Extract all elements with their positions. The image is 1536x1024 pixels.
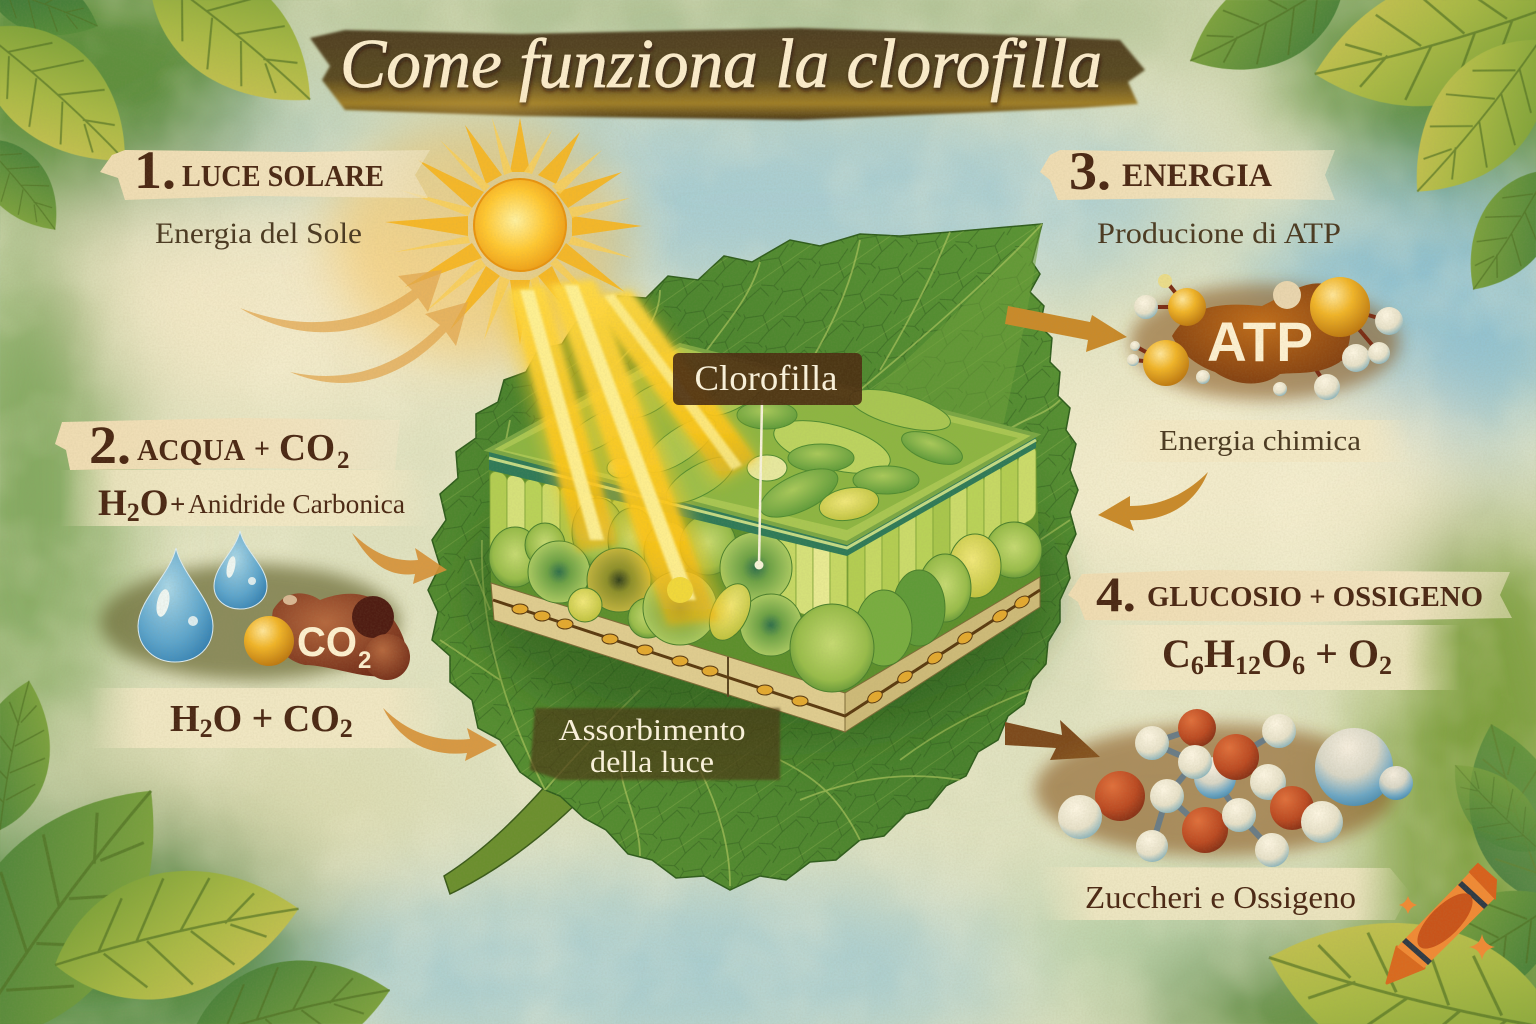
label: clorofilla <box>673 353 862 570</box>
energia chimica caption <box>1110 420 1410 462</box>
icon: CO2 molecule: 2 <box>358 647 371 674</box>
step 2 description: H <box>98 483 127 524</box>
step 2 heading <box>55 415 400 475</box>
icon: small water drop <box>214 531 267 609</box>
step 2 heading: CO <box>279 427 335 469</box>
leaf stem <box>444 775 585 894</box>
label: assorbimento della luce <box>530 708 780 780</box>
leaf blade <box>428 224 1078 890</box>
icon: crayon <box>1387 864 1496 983</box>
formula glucose + oxygen: 6 <box>1191 651 1204 680</box>
spongy mesophyll cells <box>489 498 1042 692</box>
formula glucose + oxygen: O <box>1261 631 1292 676</box>
step 2 description: O <box>140 483 169 524</box>
step 4 heading <box>1068 566 1512 622</box>
label: assorbimento della luce: Assorbimento <box>558 712 746 747</box>
sunlight arrows <box>240 270 468 383</box>
step 2 heading: 2 <box>337 447 350 474</box>
formula glucose + oxygen: 2 <box>1379 651 1392 680</box>
zuccheri e ossigeno caption <box>1040 867 1410 920</box>
formula H2O + CO2 <box>90 688 440 748</box>
palisade cells left face <box>490 470 847 636</box>
step 4 heading: GLUCOSIO + OSSIGENO <box>1147 581 1483 613</box>
sun disc <box>474 179 566 271</box>
zuccheri e ossigeno caption: Zuccheri e Ossigeno <box>1085 879 1356 915</box>
label: assorbimento della luce: della luce <box>590 744 714 779</box>
step 2 heading: 2. <box>89 415 131 475</box>
main leaf <box>428 224 1078 894</box>
energia chimica caption: Energia chimica <box>1159 425 1361 457</box>
step 1 description: Energia del Sole <box>155 217 362 250</box>
step 3 heading <box>1040 141 1335 201</box>
icon: sparkles <box>1399 896 1495 960</box>
sunbeams into leaf <box>495 280 760 630</box>
leaf lit lobe <box>870 224 1042 440</box>
step 2 heading: + <box>254 434 270 465</box>
formula H2O + CO2: O + CO <box>213 698 340 740</box>
step 2 heading: ACQUA <box>137 432 246 467</box>
arrow to ATP <box>1005 306 1127 352</box>
step 2 description <box>60 470 430 527</box>
arrows into leaf left <box>352 533 497 761</box>
icon: CO2 molecule: CO <box>297 618 357 665</box>
molecule bonds <box>1152 728 1292 850</box>
step 1 heading <box>100 140 430 200</box>
corner leaves top left <box>0 0 320 240</box>
step 2 description: 2 <box>127 498 140 527</box>
label: clorofilla: Clorofilla <box>694 358 838 398</box>
icon: large water drop <box>138 548 213 662</box>
formula glucose + oxygen: 6 <box>1292 651 1305 680</box>
block interior <box>489 445 1040 693</box>
arrow back to leaf <box>1098 472 1208 531</box>
corner leaves bottom left <box>0 670 400 1024</box>
leaf vein network <box>428 224 1078 890</box>
step 3 heading: 3. <box>1069 141 1111 201</box>
formula glucose + oxygen: H <box>1204 631 1235 676</box>
title banner <box>310 26 1145 120</box>
step 3 heading: ENERGIA <box>1122 158 1272 194</box>
top face of cross-section <box>489 345 1036 556</box>
glucose and oxygen molecules <box>1035 709 1413 867</box>
ATP molecule <box>1127 274 1403 400</box>
corner leaves top right <box>1180 0 1536 300</box>
formula glucose + oxygen: 12 <box>1235 651 1261 680</box>
formula H2O + CO2: H <box>170 698 200 740</box>
formula glucose + oxygen: + O <box>1305 631 1379 676</box>
step 4 heading: 4. <box>1096 566 1136 622</box>
title text: Come funziona la clorofilla <box>340 26 1102 103</box>
arrow to molecules <box>1005 720 1100 760</box>
water drops and CO2 molecule <box>100 531 410 680</box>
step 2 description: Anidride Carbonica <box>188 489 405 519</box>
formula H2O + CO2: 2 <box>340 714 353 743</box>
step 3 description: Producione di ATP <box>1097 217 1341 250</box>
icon: CO2 molecule <box>244 593 410 680</box>
step 1 heading: LUCE SOLARE <box>182 158 384 193</box>
corner leaves bottom right <box>1260 700 1536 1024</box>
ATP molecule: ATP <box>1207 310 1313 373</box>
lower epidermis slab <box>491 577 1040 732</box>
step 1 heading: 1. <box>134 140 176 200</box>
formula glucose + oxygen: C <box>1162 631 1191 676</box>
leaf veins <box>440 224 1070 886</box>
sun glow and rays <box>330 118 642 360</box>
step 2 description: + <box>170 489 185 519</box>
formula H2O + CO2: 2 <box>200 714 213 743</box>
formula glucose + oxygen <box>1090 625 1460 690</box>
palisade cells right face <box>848 445 1036 633</box>
leaf cross-section block <box>489 345 1042 732</box>
